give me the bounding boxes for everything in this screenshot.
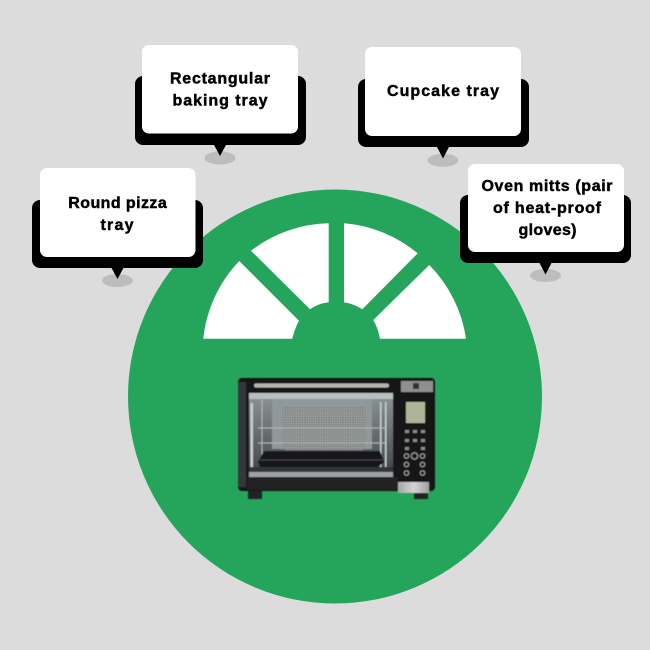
oven lower door strip <box>247 477 398 490</box>
rotisserie basket <box>283 407 365 450</box>
callout: round pizza tray <box>32 168 203 287</box>
callout: oven mitts: gloves) <box>518 222 576 239</box>
callout: oven mitts: of heat-proof <box>493 200 602 217</box>
oven body <box>238 378 435 491</box>
oven feet <box>248 489 428 499</box>
callout: rectangular baking tray: Rectangular <box>170 70 270 88</box>
callout: oven mitts <box>460 164 631 282</box>
steel plate <box>398 482 429 493</box>
oven window <box>249 393 393 477</box>
baking tray <box>258 451 384 467</box>
control panel <box>401 381 433 475</box>
callout: round pizza tray: tray <box>100 217 134 234</box>
oven <box>238 378 435 499</box>
callout: round pizza tray: Round pizza <box>68 195 167 212</box>
icon: white semicircular fan <box>203 223 466 339</box>
green circle <box>128 190 542 604</box>
callout: rectangular baking tray <box>135 45 306 164</box>
callout: oven mitts: Oven mitts (pair <box>482 178 612 195</box>
callout: rectangular baking tray: baking tray <box>172 92 268 110</box>
oven handle <box>254 384 389 388</box>
callout: cupcake tray <box>358 47 529 167</box>
callout: cupcake tray: Cupcake tray <box>387 83 499 100</box>
